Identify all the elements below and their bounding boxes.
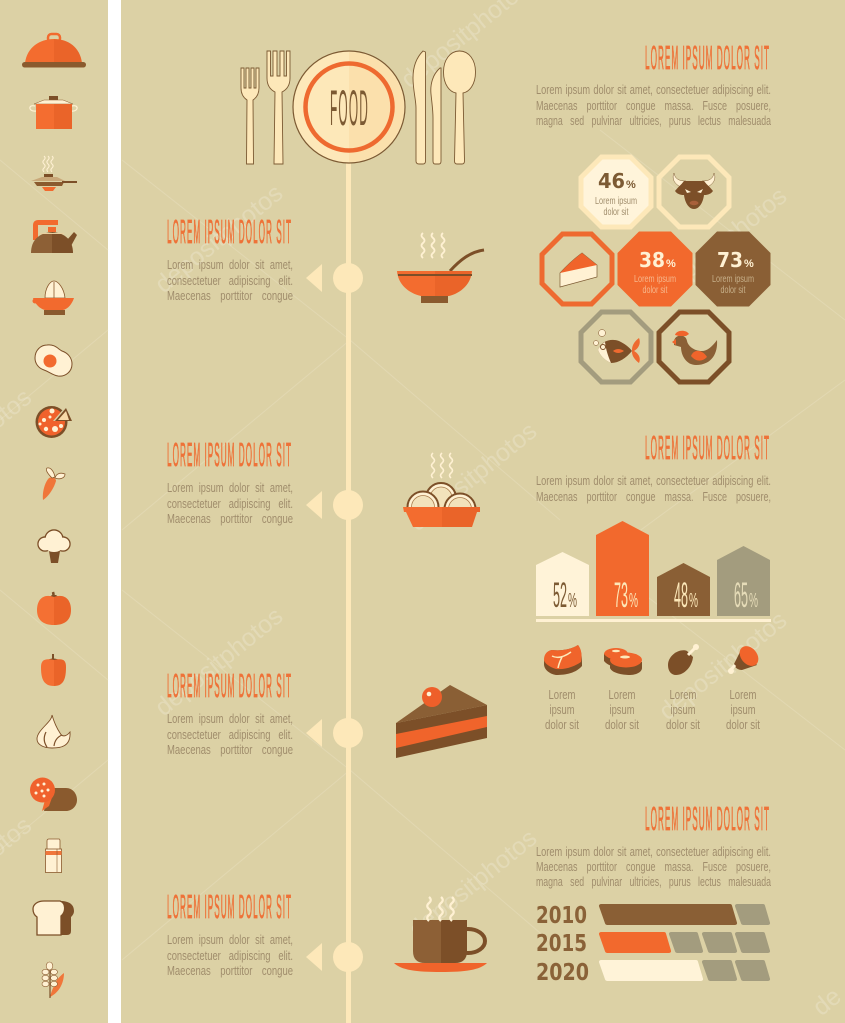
icon: fried egg [35,345,72,376]
bar 52%: % [568,590,577,612]
arrow [306,491,322,519]
bar 65%: % [749,590,758,612]
cutlery and plate: FOOD [330,80,369,136]
text block: Maecenas porttitor congue [167,512,293,526]
icon: bread [33,901,74,935]
watermark text: depositphotos [404,417,542,537]
timeline item 2: LOREM IPSUM DOLOR SIT [167,436,292,473]
timeline node [333,942,363,972]
bar 48% [657,563,710,616]
food labels: ipsum [670,703,696,717]
icon: cauliflower [38,530,70,563]
octagon: 38% [618,232,692,306]
octagon: 73%: Lorem ipsum [712,274,754,285]
timeline line [346,160,351,1023]
octagon: cheese [542,234,612,304]
octagon: 73% [696,232,770,306]
timeline item 4: LOREM IPSUM DOLOR SIT [167,888,292,925]
icon: ham [728,642,762,674]
panel: hexagon stats [536,39,771,382]
text block: Lorem ipsum dolor sit amet, consectetuer adipiscing elit. [536,83,771,97]
row 2010: 2010 [536,903,587,929]
panel: year progress bars [536,800,771,986]
food labels: Lorem [670,688,696,702]
octagon: 38%: Lorem ipsum [634,274,676,285]
text block [536,83,771,128]
icon: soup bowl [397,233,484,303]
icon: cake slice [396,685,487,758]
food labels: ipsum [610,703,634,717]
octagon: 38%: dolor sit [642,285,668,296]
watermark text: depositphotos [404,824,542,944]
octagon: 46%: % [626,179,636,191]
icon: pumpkin [37,592,71,625]
timeline node [333,490,363,520]
food labels: ipsum [550,703,574,717]
text block: consectetuer adipiscing elit. [167,949,293,963]
icon: carrot [43,468,65,500]
text block: consectetuer adipiscing elit. [167,728,293,742]
watermark text: depositphotos [150,602,288,722]
bar 65%: 65 [734,576,748,615]
arrow [306,264,322,292]
text block: Maecenas porttitor congue [167,964,293,978]
icon: small knife [431,68,441,164]
food labels: dolor sit [666,718,700,732]
icon: drumstick [668,644,699,675]
icon: milk carton [46,839,62,872]
food labels: Lorem [548,688,576,702]
watermark text: depositphotos [654,182,792,302]
text block: Lorem ipsum dolor sit amet, consectetuer adipiscing elit. [536,474,771,488]
text block: Maecenas porttitor congue [167,743,293,757]
plate [293,51,405,163]
cutlery and plate [241,51,476,164]
text block [167,258,293,303]
icon: juicer [32,281,74,315]
bar 73% [596,521,649,616]
icon: salami [30,778,77,811]
watermark text: depositphotos [150,179,288,299]
food labels: ipsum [730,703,756,717]
text block [536,845,771,889]
icon: spoon [444,51,476,164]
row 2015: 2015 [536,931,587,957]
text block: Lorem ipsum dolor sit amet, consectetuer adipiscing elit. [536,845,771,859]
text block: consectetuer adipiscing elit. [167,497,293,511]
food labels: dolor sit [605,718,639,732]
arrow [306,943,322,971]
icon: steak [544,645,582,675]
icon: bell pepper [41,654,66,686]
text block: Lorem ipsum dolor sit amet, [167,712,293,726]
bar 52%: 52 [553,576,567,615]
octagon: 73%: 73 [717,248,743,272]
arrow [306,719,322,747]
icon: small fork [241,68,259,164]
text block [536,474,771,504]
octagon: 73%: dolor sit [720,285,746,296]
bar 52% [536,552,589,616]
icon: salmon steaks [604,648,642,675]
bar 73%: 73 [614,576,628,615]
text block [167,933,293,978]
timeline node [333,718,363,748]
bar 48%: % [689,590,698,612]
timeline item 2 [167,436,480,527]
row 2020 [536,960,768,986]
icon: pot [30,96,77,129]
timeline item 3: LOREM IPSUM DOLOR SIT [167,667,292,704]
octagon: 73%: % [744,258,754,270]
row 2015 [536,931,768,957]
watermark text: depositphotos [654,606,792,726]
octagon: chicken [659,312,729,382]
octagon: 38%: % [666,258,676,270]
octagon: bull [659,157,729,227]
icon: garlic [37,715,70,748]
row 2020: 2020 [536,960,589,986]
icon: pizza [36,405,75,438]
text block: Maecenas porttitor congue [167,289,293,303]
text block: Lorem ipsum dolor sit amet, [167,258,293,272]
icon: wheat [42,962,64,998]
text block: consectetuer adipiscing elit. [167,274,293,288]
food labels: dolor sit [726,718,760,732]
food labels [545,688,760,732]
icon: large fork [267,51,290,164]
sidebar: food icons [22,34,86,998]
bar 73%: % [629,590,638,612]
icon: large knife [413,51,426,164]
icon: cloche [22,34,86,68]
octagon: 46%: 46 [598,169,625,193]
octagon: 38%: 38 [639,248,665,272]
panel: bar chart [536,429,771,732]
octagon: 46%: Lorem ipsum [595,196,637,207]
bar 65% [717,546,770,616]
icon: coffee cup [394,897,487,972]
timeline item 3 [167,667,487,758]
bar 48%: 48 [674,576,688,615]
food labels: Lorem [730,688,756,702]
icon: noodle bowl [403,453,480,527]
octagon: fish [581,312,651,382]
food labels: dolor sit [545,718,579,732]
text block: Lorem ipsum dolor sit amet, [167,481,293,495]
timeline item 1: LOREM IPSUM DOLOR SIT [167,213,292,250]
text block [167,481,293,526]
row 2010 [536,903,768,929]
icon: frying pan [31,156,77,191]
food labels: Lorem [608,688,636,702]
text block [167,712,293,757]
octagon: 46% [581,157,651,227]
timeline item 1 [167,213,484,303]
icon: kettle [31,222,77,253]
octagon: 46%: dolor sit [604,207,629,218]
timeline node [333,263,363,293]
timeline item 4 [167,888,487,978]
text block: Lorem ipsum dolor sit amet, [167,933,293,947]
